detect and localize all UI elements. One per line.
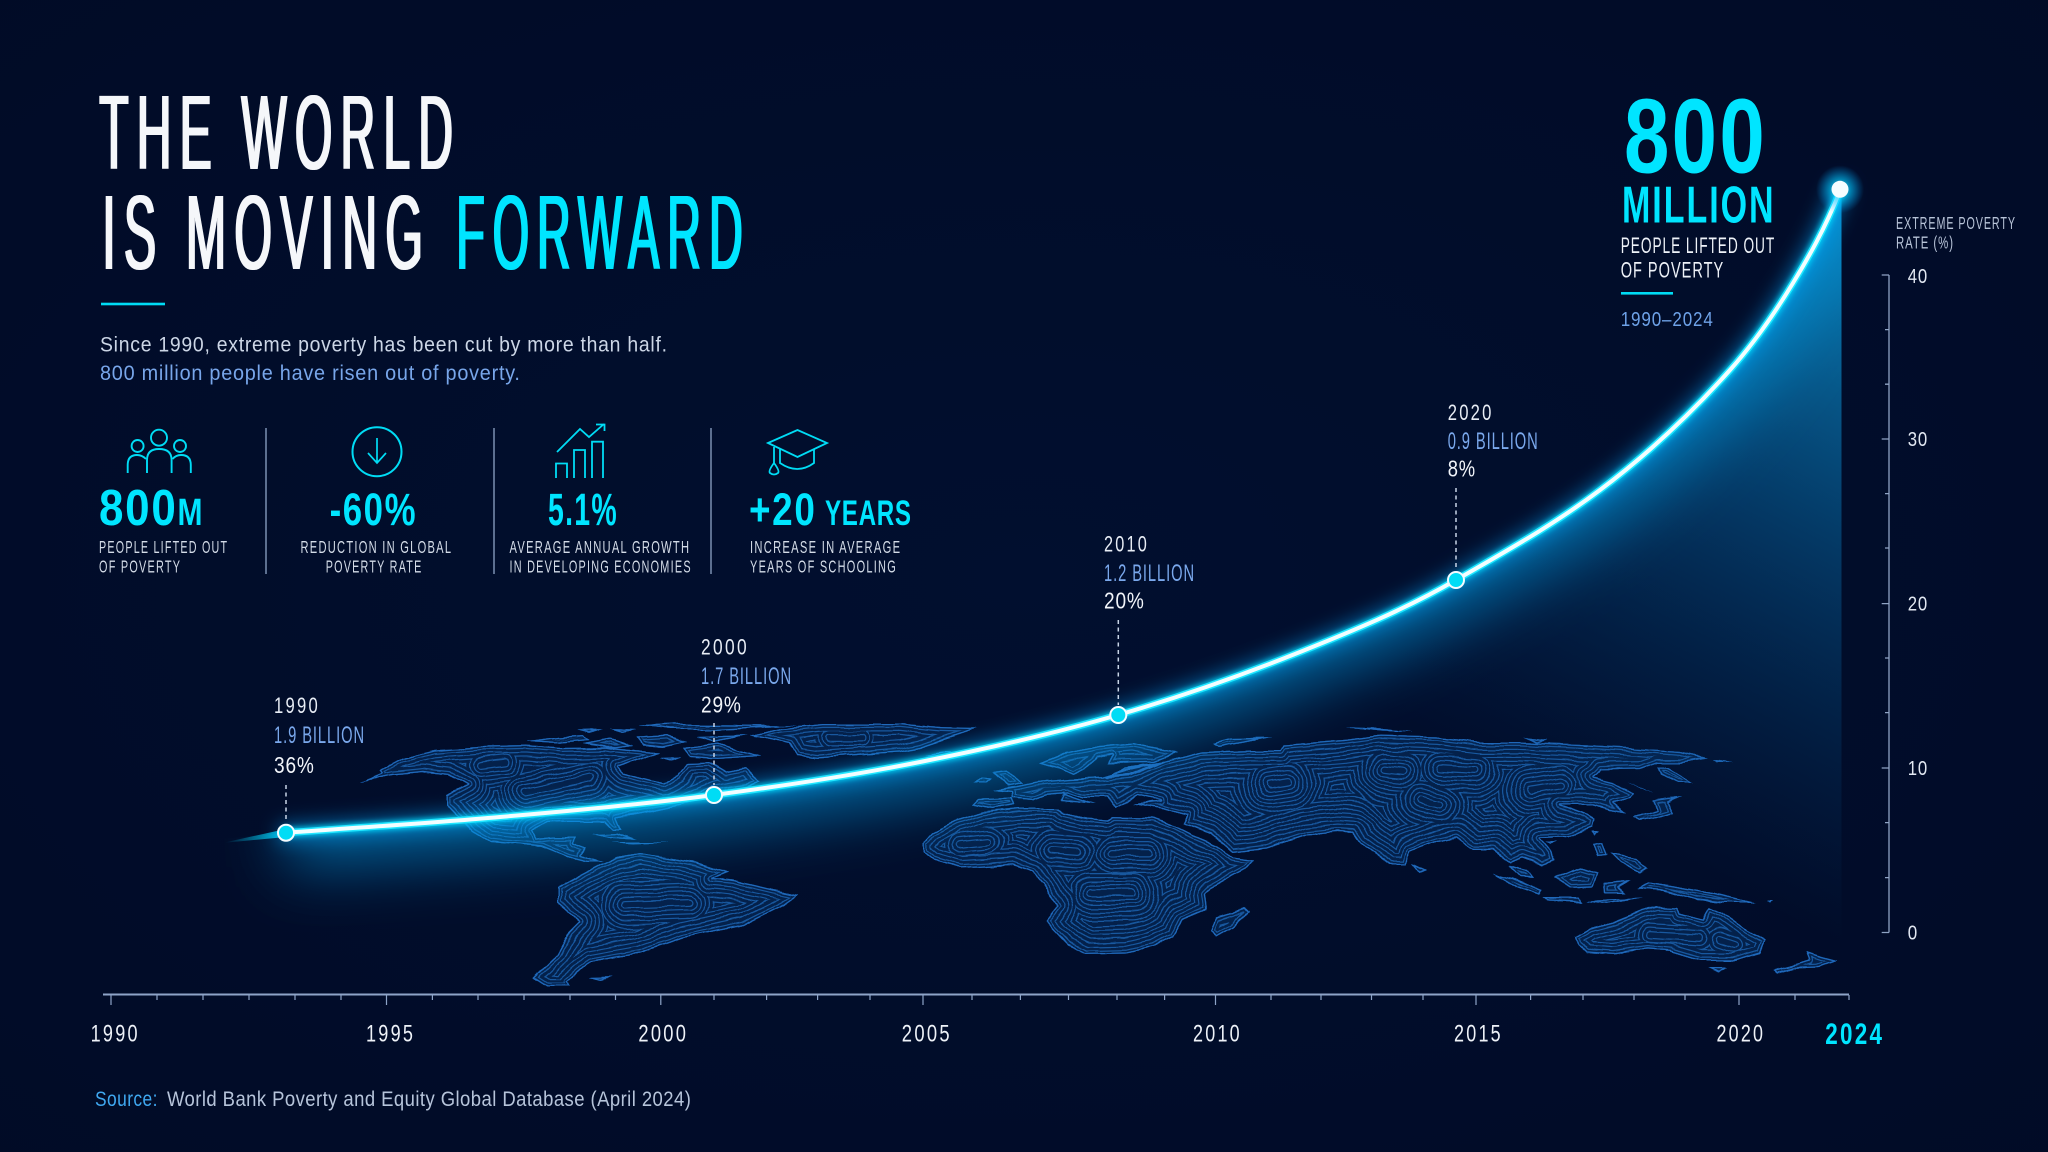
marker 1990: 1990	[274, 693, 320, 718]
callout: 800 million: OF POVERTY	[1621, 258, 1724, 283]
marker 2000: 29%	[701, 692, 742, 718]
intro text	[100, 334, 668, 385]
x axis: 2020	[1716, 1021, 1765, 1048]
x axis: 1995	[366, 1021, 415, 1048]
stat: people lifted	[99, 430, 228, 576]
marker 2020: 8%	[1448, 456, 1476, 482]
stat: poverty reduction	[300, 427, 452, 576]
stat dividers	[266, 428, 711, 574]
text: FORWARD	[456, 174, 751, 292]
stat: people lifted: M	[178, 492, 202, 534]
marker 2010: 20%	[1104, 587, 1145, 613]
stat: annual growth	[510, 424, 692, 576]
stat: schooling	[749, 430, 912, 576]
glowing curve	[222, 191, 1840, 843]
x axis: 2000	[638, 1021, 688, 1048]
stat: annual growth: IN DEVELOPING ECONOMIES	[510, 556, 692, 576]
title: IS MOVING	[102, 174, 431, 292]
y axis title	[1896, 213, 2016, 252]
source note: Source:	[95, 1088, 158, 1111]
x axis: 1990	[91, 1021, 140, 1048]
title: THE WORLD	[99, 74, 461, 192]
icon: people	[128, 430, 191, 473]
stat: people lifted: PEOPLE LIFTED OUT	[99, 537, 228, 557]
marker 2000: 2000	[701, 634, 749, 660]
stat: schooling: +20	[749, 484, 816, 535]
marker 2010: 1.2 BILLION	[1104, 560, 1195, 587]
world map with contour lines	[360, 722, 1837, 986]
stat: people lifted: OF POVERTY	[99, 556, 181, 576]
x axis: 2005	[902, 1021, 952, 1048]
y axis: 30	[1908, 429, 1928, 451]
area under curve	[248, 198, 1842, 905]
y axis: 0	[1908, 922, 1918, 944]
callout: 800 million: MILLION	[1622, 177, 1776, 235]
marker 1990	[274, 693, 365, 841]
marker 1990: 36%	[274, 752, 315, 778]
x axis: 2024	[1825, 1018, 1884, 1051]
y axis: 20	[1908, 594, 1928, 616]
stat: schooling: YEARS	[825, 494, 912, 533]
callout: 800 million: 800	[1624, 78, 1767, 196]
marker 2010: 2010	[1104, 532, 1149, 557]
stat: people lifted: 800	[99, 479, 178, 536]
x axis: 2010	[1193, 1021, 1242, 1048]
curve endpoint 2024	[1816, 165, 1864, 213]
marker 2010	[1104, 532, 1195, 723]
title rule	[101, 303, 165, 305]
title	[99, 74, 751, 292]
icon: graduation cap	[768, 430, 827, 474]
x axis: 2015	[1454, 1021, 1503, 1048]
y axis: 40	[1908, 266, 1928, 288]
marker 2020: 2020	[1448, 400, 1494, 425]
source note: World Bank Poverty and Equity Global Database (April 2024)	[167, 1088, 691, 1111]
icon: growth chart	[556, 424, 604, 478]
marker 1990: 1.9 BILLION	[274, 722, 365, 749]
y axis	[1882, 213, 2016, 944]
y axis: 10	[1908, 758, 1928, 780]
marker 2020	[1448, 400, 1539, 588]
stat: poverty reduction: REDUCTION IN GLOBAL	[300, 537, 452, 557]
callout: 800 million	[1621, 78, 1776, 331]
marker 2000: 1.7 BILLION	[701, 663, 792, 690]
intro text: 800 million people have risen out of poverty.	[100, 362, 521, 385]
stat: annual growth: 5.1%	[548, 484, 618, 535]
intro text: Since 1990, extreme poverty has been cut by more than half.	[100, 334, 668, 357]
marker 2000	[701, 634, 792, 803]
stat: schooling: YEARS OF SCHOOLING	[750, 556, 897, 576]
marker 2020: 0.9 BILLION	[1448, 428, 1539, 455]
stat: poverty reduction: -60%	[330, 484, 417, 535]
y axis title: RATE (%)	[1896, 232, 1954, 252]
stat: poverty reduction: POVERTY RATE	[326, 556, 422, 576]
callout: 800 million: PEOPLE LIFTED OUT	[1621, 233, 1775, 258]
x axis	[91, 994, 1884, 1051]
stat: schooling: INCREASE IN AVERAGE	[750, 537, 901, 557]
icon: down arrow	[352, 427, 402, 476]
callout: 800 million: 1990–2024	[1621, 309, 1714, 331]
stat: annual growth: AVERAGE ANNUAL GROWTH	[510, 537, 690, 557]
